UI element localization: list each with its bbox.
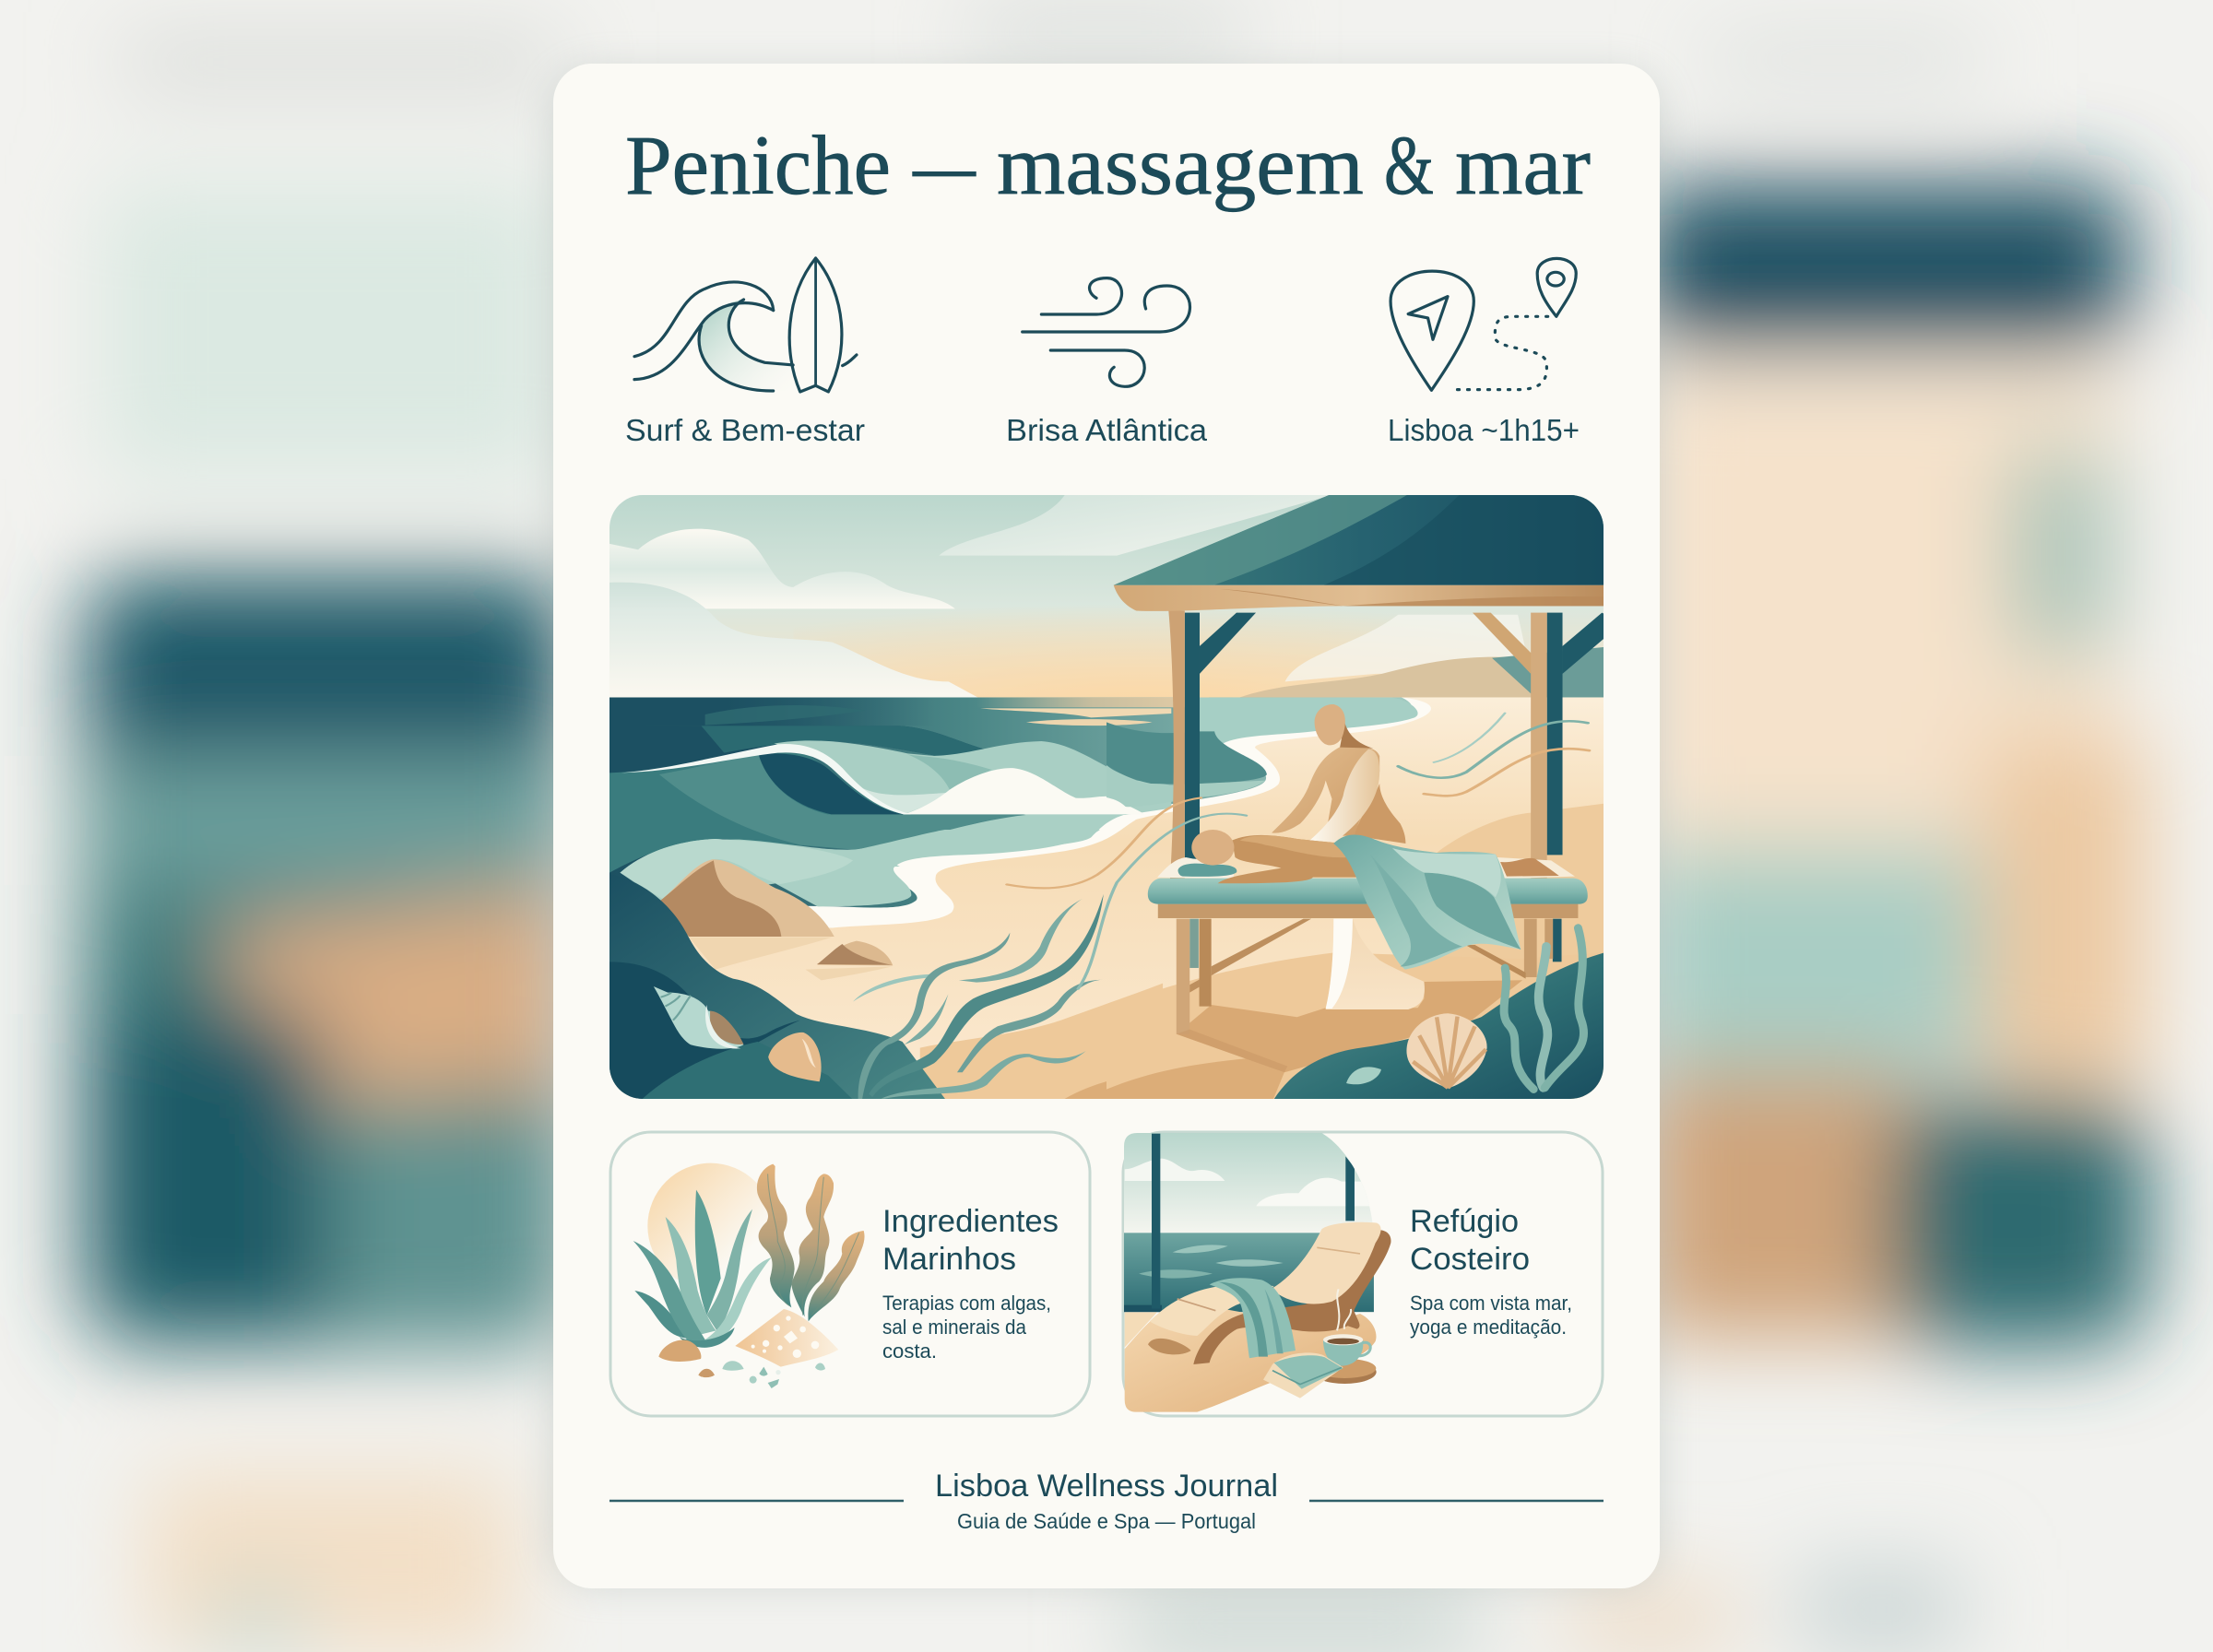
title: — [912, 118, 976, 212]
title [625, 118, 1591, 212]
shallow water [620, 830, 1100, 906]
table legs [1177, 919, 1562, 1072]
icon row [625, 258, 1580, 447]
title: Peniche [625, 118, 891, 212]
dark hill right [1272, 952, 1604, 1103]
hero illustration [599, 489, 1614, 1107]
title: & [1384, 118, 1434, 212]
heading: refuge [1410, 1204, 1530, 1277]
label: breeze: Brisa Atlântica [1006, 413, 1208, 447]
sky and clouds [609, 495, 1604, 1060]
shoreline right [1106, 698, 1418, 807]
illustration: lounge chair with sea view [1120, 1129, 1391, 1412]
label: lisbon distance: Lisboa ~1h15+ [1388, 413, 1580, 447]
heading: ingredients [882, 1204, 1059, 1277]
text: refuge description: yoga e meditação. [1410, 1316, 1567, 1339]
title: mar [1455, 118, 1591, 212]
heading: ingredients: Marinhos [882, 1242, 1016, 1277]
footer [609, 1469, 1604, 1533]
text: ingredients description [882, 1292, 1051, 1363]
card: coastal refuge [1120, 1129, 1603, 1416]
footer tagline: Guia de Saúde e Spa — Portugal [957, 1509, 1256, 1533]
text: refuge description: Spa com vista mar, [1410, 1292, 1572, 1315]
main card [553, 64, 1660, 1588]
card: marine ingredients [610, 1132, 1090, 1416]
label: surf: Surf & Bem-estar [625, 413, 865, 447]
therapist torso [1272, 704, 1405, 844]
heading: ingredients: Ingredientes [882, 1204, 1059, 1239]
seaweed right [1504, 928, 1584, 1090]
icon: wave and surfboard [634, 258, 857, 392]
massage pad [1148, 857, 1588, 918]
wind streaks [1007, 714, 1589, 989]
text: ingredients description: sal e minerais da [882, 1316, 1027, 1339]
small shell [1346, 1067, 1381, 1084]
pavilion [1114, 494, 1614, 884]
sand dunes [920, 804, 1604, 1103]
foreground left: rocks, hill, shells, seaweed [609, 859, 1104, 1103]
footer brand: Lisboa Wellness Journal [935, 1469, 1278, 1504]
text: ingredients description: costa. [882, 1339, 937, 1363]
massage scene: table, therapist, client, towel [1148, 704, 1604, 1103]
towel [1333, 834, 1521, 970]
ocean waves [609, 698, 1209, 873]
text: refuge description [1410, 1292, 1572, 1339]
client [1178, 830, 1559, 883]
icon: wind [1023, 278, 1189, 386]
icon: map route [1391, 258, 1576, 390]
therapist skirt [1326, 919, 1425, 1009]
illustration: aloe, kelp and salt [633, 1163, 865, 1388]
scallop shell [1406, 1013, 1487, 1089]
text: ingredients description: Terapias com algas, [882, 1292, 1051, 1315]
title: massagem [997, 118, 1364, 212]
heading: refuge: Refúgio [1410, 1204, 1519, 1239]
card shadow [553, 72, 1660, 1584]
heading: refuge: Costeiro [1410, 1242, 1530, 1277]
